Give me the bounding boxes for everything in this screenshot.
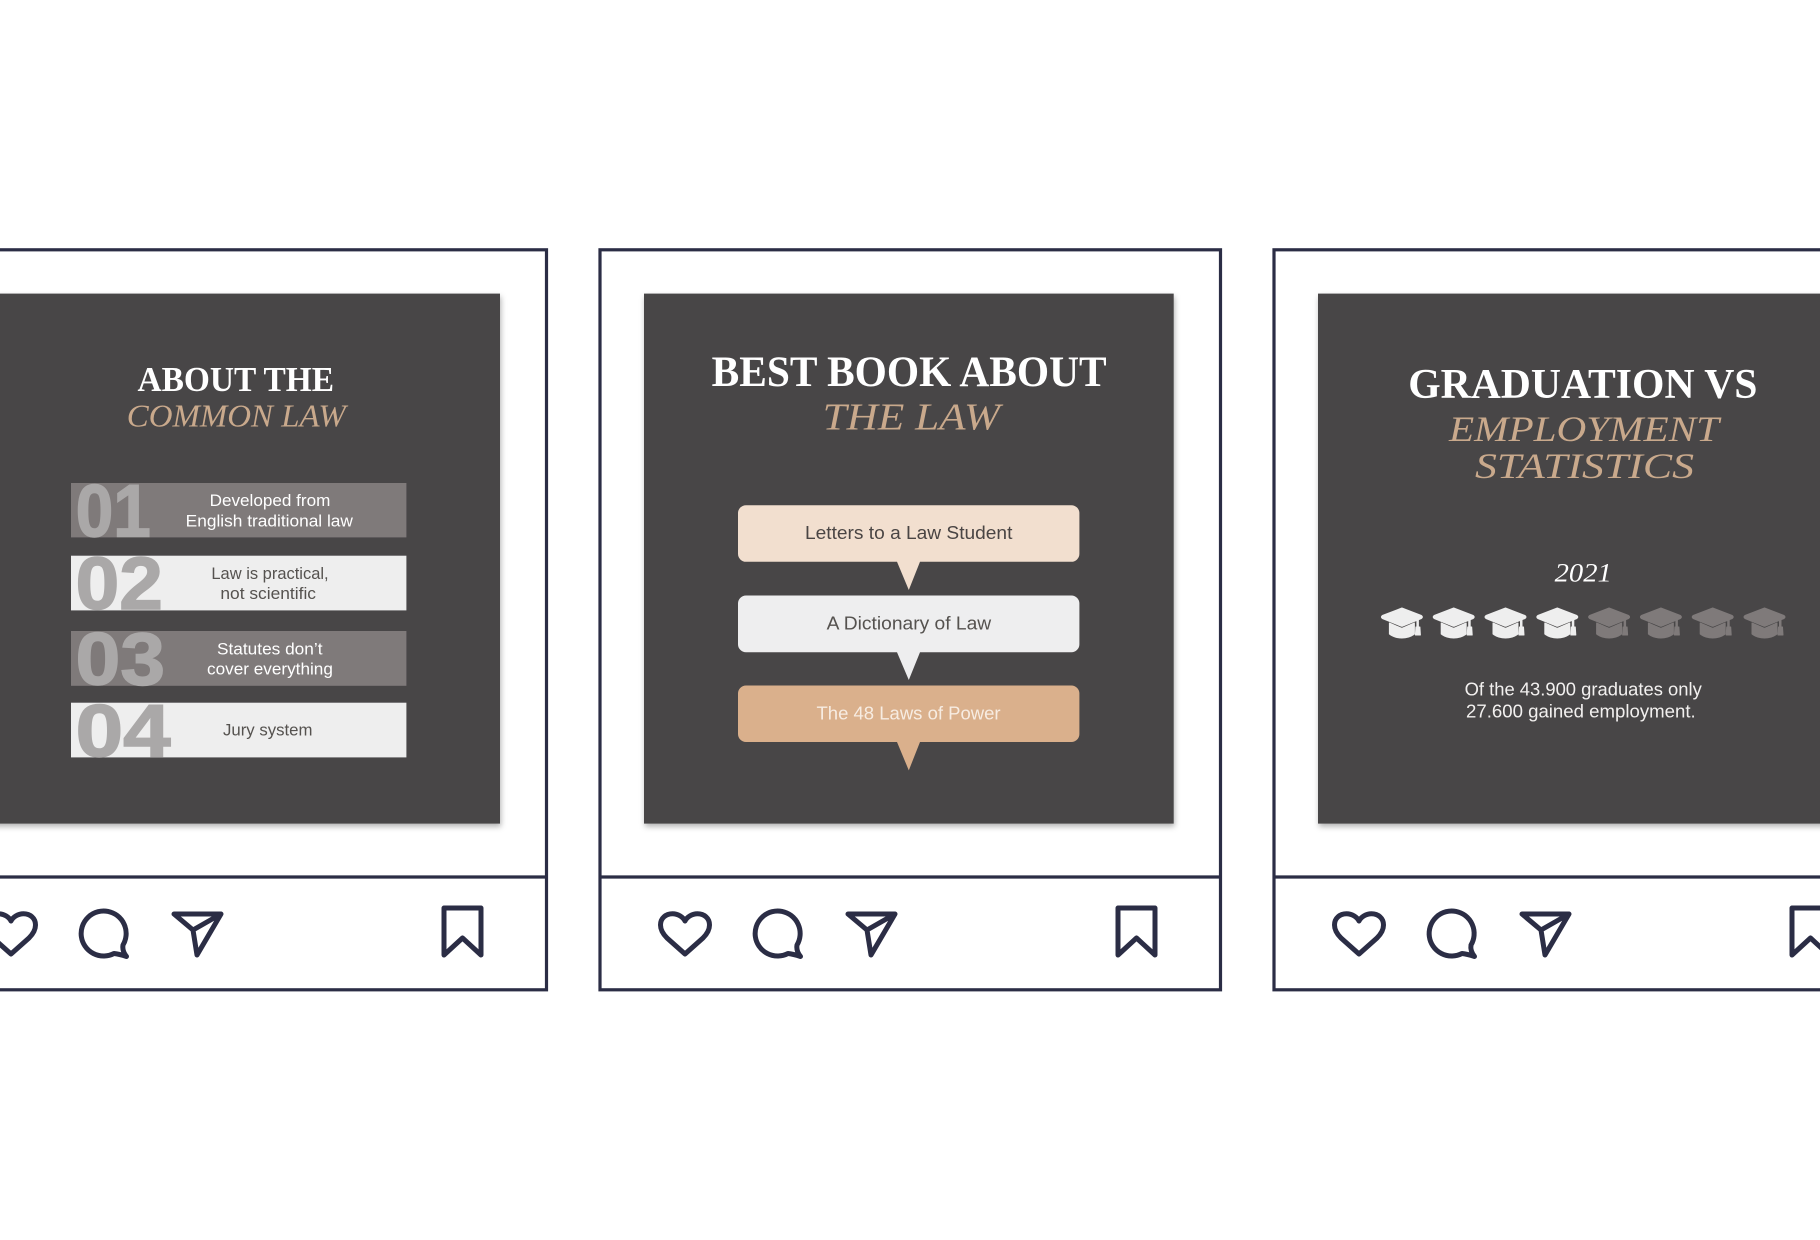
callout: letters to a law student: [738, 505, 1079, 590]
icon: bookmark: [444, 908, 481, 955]
icon: heart: [660, 914, 710, 954]
row 04: Jury system: [223, 721, 312, 740]
panel: statistics: [1318, 294, 1820, 824]
icon: bookmark: [1792, 908, 1820, 955]
row 03: Statutes don’t: [217, 640, 323, 658]
panel: common law: [0, 294, 500, 824]
callout: the 48 laws of power: The 48 Laws of Power: [816, 704, 1001, 724]
heading: graduation vs employment statistics: STATISTICS: [1475, 446, 1694, 486]
year label: 2021: [1555, 559, 1612, 588]
icon: send: [174, 914, 221, 955]
icon: cap filled 1: [1381, 608, 1422, 638]
icon: comment: [755, 911, 800, 956]
callout: letters to a law student: Letters to a Law Student: [805, 523, 1012, 543]
post 2: best book about the law: [600, 250, 1220, 990]
row 01: English traditional law: [186, 512, 354, 531]
row 02: not scientific: [220, 584, 317, 603]
row 02: 02: [76, 542, 163, 625]
icon: cap filled 3: [1485, 608, 1526, 638]
post frame: [0, 250, 546, 990]
heading: about the common law: ABOUT THE: [138, 360, 334, 399]
row 03: cover everything: [207, 659, 333, 678]
action icons: [1334, 908, 1820, 956]
post frame: [1274, 250, 1820, 990]
row 01: [71, 470, 406, 552]
row 03: [71, 618, 406, 701]
row 02: [71, 542, 406, 625]
icon: heart: [0, 914, 36, 954]
callout: a dictionary of law: A Dictionary of Law: [827, 614, 992, 634]
panel: best books: [644, 294, 1174, 824]
text block: statistic summary: 27.600 gained employment.: [1466, 702, 1696, 722]
heading: best book about the law: BEST BOOK ABOUT: [712, 349, 1107, 396]
pictogram: graduation caps: [1381, 608, 1785, 638]
icon: cap filled 2: [1433, 608, 1474, 638]
heading: best book about the law: [712, 349, 1107, 438]
callout: a dictionary of law: [738, 596, 1079, 680]
post 3: graduation vs employment statistics: [1274, 250, 1820, 990]
icon: comment: [81, 911, 126, 956]
icon: heart: [1334, 914, 1384, 954]
post frame: [600, 250, 1220, 990]
heading: graduation vs employment statistics: [1408, 362, 1758, 486]
row 01: 01: [76, 470, 151, 552]
icon: cap filled 4: [1537, 608, 1578, 638]
icon: cap muted 6: [1640, 608, 1681, 638]
heading: about the common law: COMMON LAW: [127, 397, 349, 433]
heading: best book about the law: THE LAW: [823, 396, 1004, 438]
post 1: about the common law: [0, 250, 546, 990]
icon: comment: [1429, 911, 1474, 956]
callout: the 48 laws of power: [738, 686, 1079, 770]
row 01: Developed from: [210, 491, 330, 510]
action icons: [0, 908, 481, 956]
action icons: [660, 908, 1155, 956]
icon: cap muted 5: [1589, 608, 1630, 638]
text block: statistic summary: [1465, 679, 1702, 722]
icon: send: [1522, 914, 1569, 955]
row 02: Law is practical,: [211, 564, 329, 583]
icon: bookmark: [1118, 908, 1155, 955]
heading: graduation vs employment statistics: EMPLOYMENT: [1448, 409, 1722, 449]
text block: statistic summary: Of the 43.900 graduates only: [1465, 679, 1702, 699]
heading: graduation vs employment statistics: GRADUATION VS: [1408, 362, 1758, 408]
row 03: 03: [76, 618, 165, 701]
heading: about the common law: [127, 360, 349, 433]
icon: send: [848, 914, 895, 955]
icon: cap muted 7: [1692, 608, 1733, 638]
icon: cap muted 8: [1744, 608, 1785, 638]
row 04: 04: [76, 690, 171, 773]
row 04: [71, 690, 406, 773]
